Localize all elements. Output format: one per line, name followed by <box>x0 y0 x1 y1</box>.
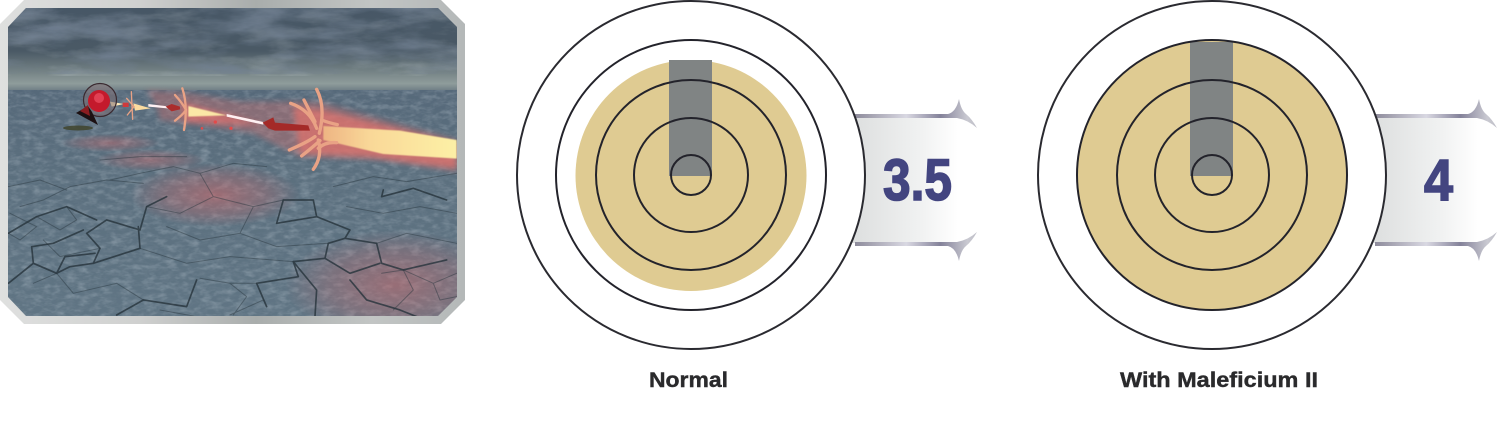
chart: normal range rings <box>517 1 865 349</box>
label: Normal: Normal <box>649 369 728 392</box>
flat shadow <box>63 126 93 130</box>
tab background <box>1370 117 1490 243</box>
tab: value 3.5 <box>850 99 977 261</box>
label: With Maleficium II: With Maleficium II <box>1120 369 1318 392</box>
grey blocked sector <box>1190 42 1233 176</box>
beam and swords <box>110 88 457 172</box>
outer ring <box>1038 1 1386 349</box>
icon: caster orb <box>76 83 117 125</box>
panel: game screenshot <box>0 0 465 324</box>
range rings <box>1077 40 1347 310</box>
red aura <box>147 90 457 172</box>
beams <box>323 126 457 159</box>
chart: with Maleficium II range rings <box>1038 1 1386 349</box>
tan area of effect <box>576 60 806 291</box>
tab top ornament <box>1375 99 1497 128</box>
sword tines <box>127 88 337 169</box>
tab background <box>850 117 970 243</box>
tab: value 4 <box>1370 99 1497 261</box>
outer ring <box>517 1 865 349</box>
tan area of effect <box>1077 40 1347 310</box>
tab bottom ornament <box>1375 232 1497 261</box>
tab top ornament <box>855 99 977 128</box>
hilts <box>263 117 310 131</box>
tab bottom ornament <box>855 232 977 261</box>
grey blocked sector <box>669 60 712 176</box>
value text: 3.5 <box>883 148 952 213</box>
value text: 4 <box>1424 148 1453 213</box>
range rings <box>556 40 826 310</box>
scene: desert with red sword beam <box>8 8 457 316</box>
image frame <box>0 0 465 324</box>
